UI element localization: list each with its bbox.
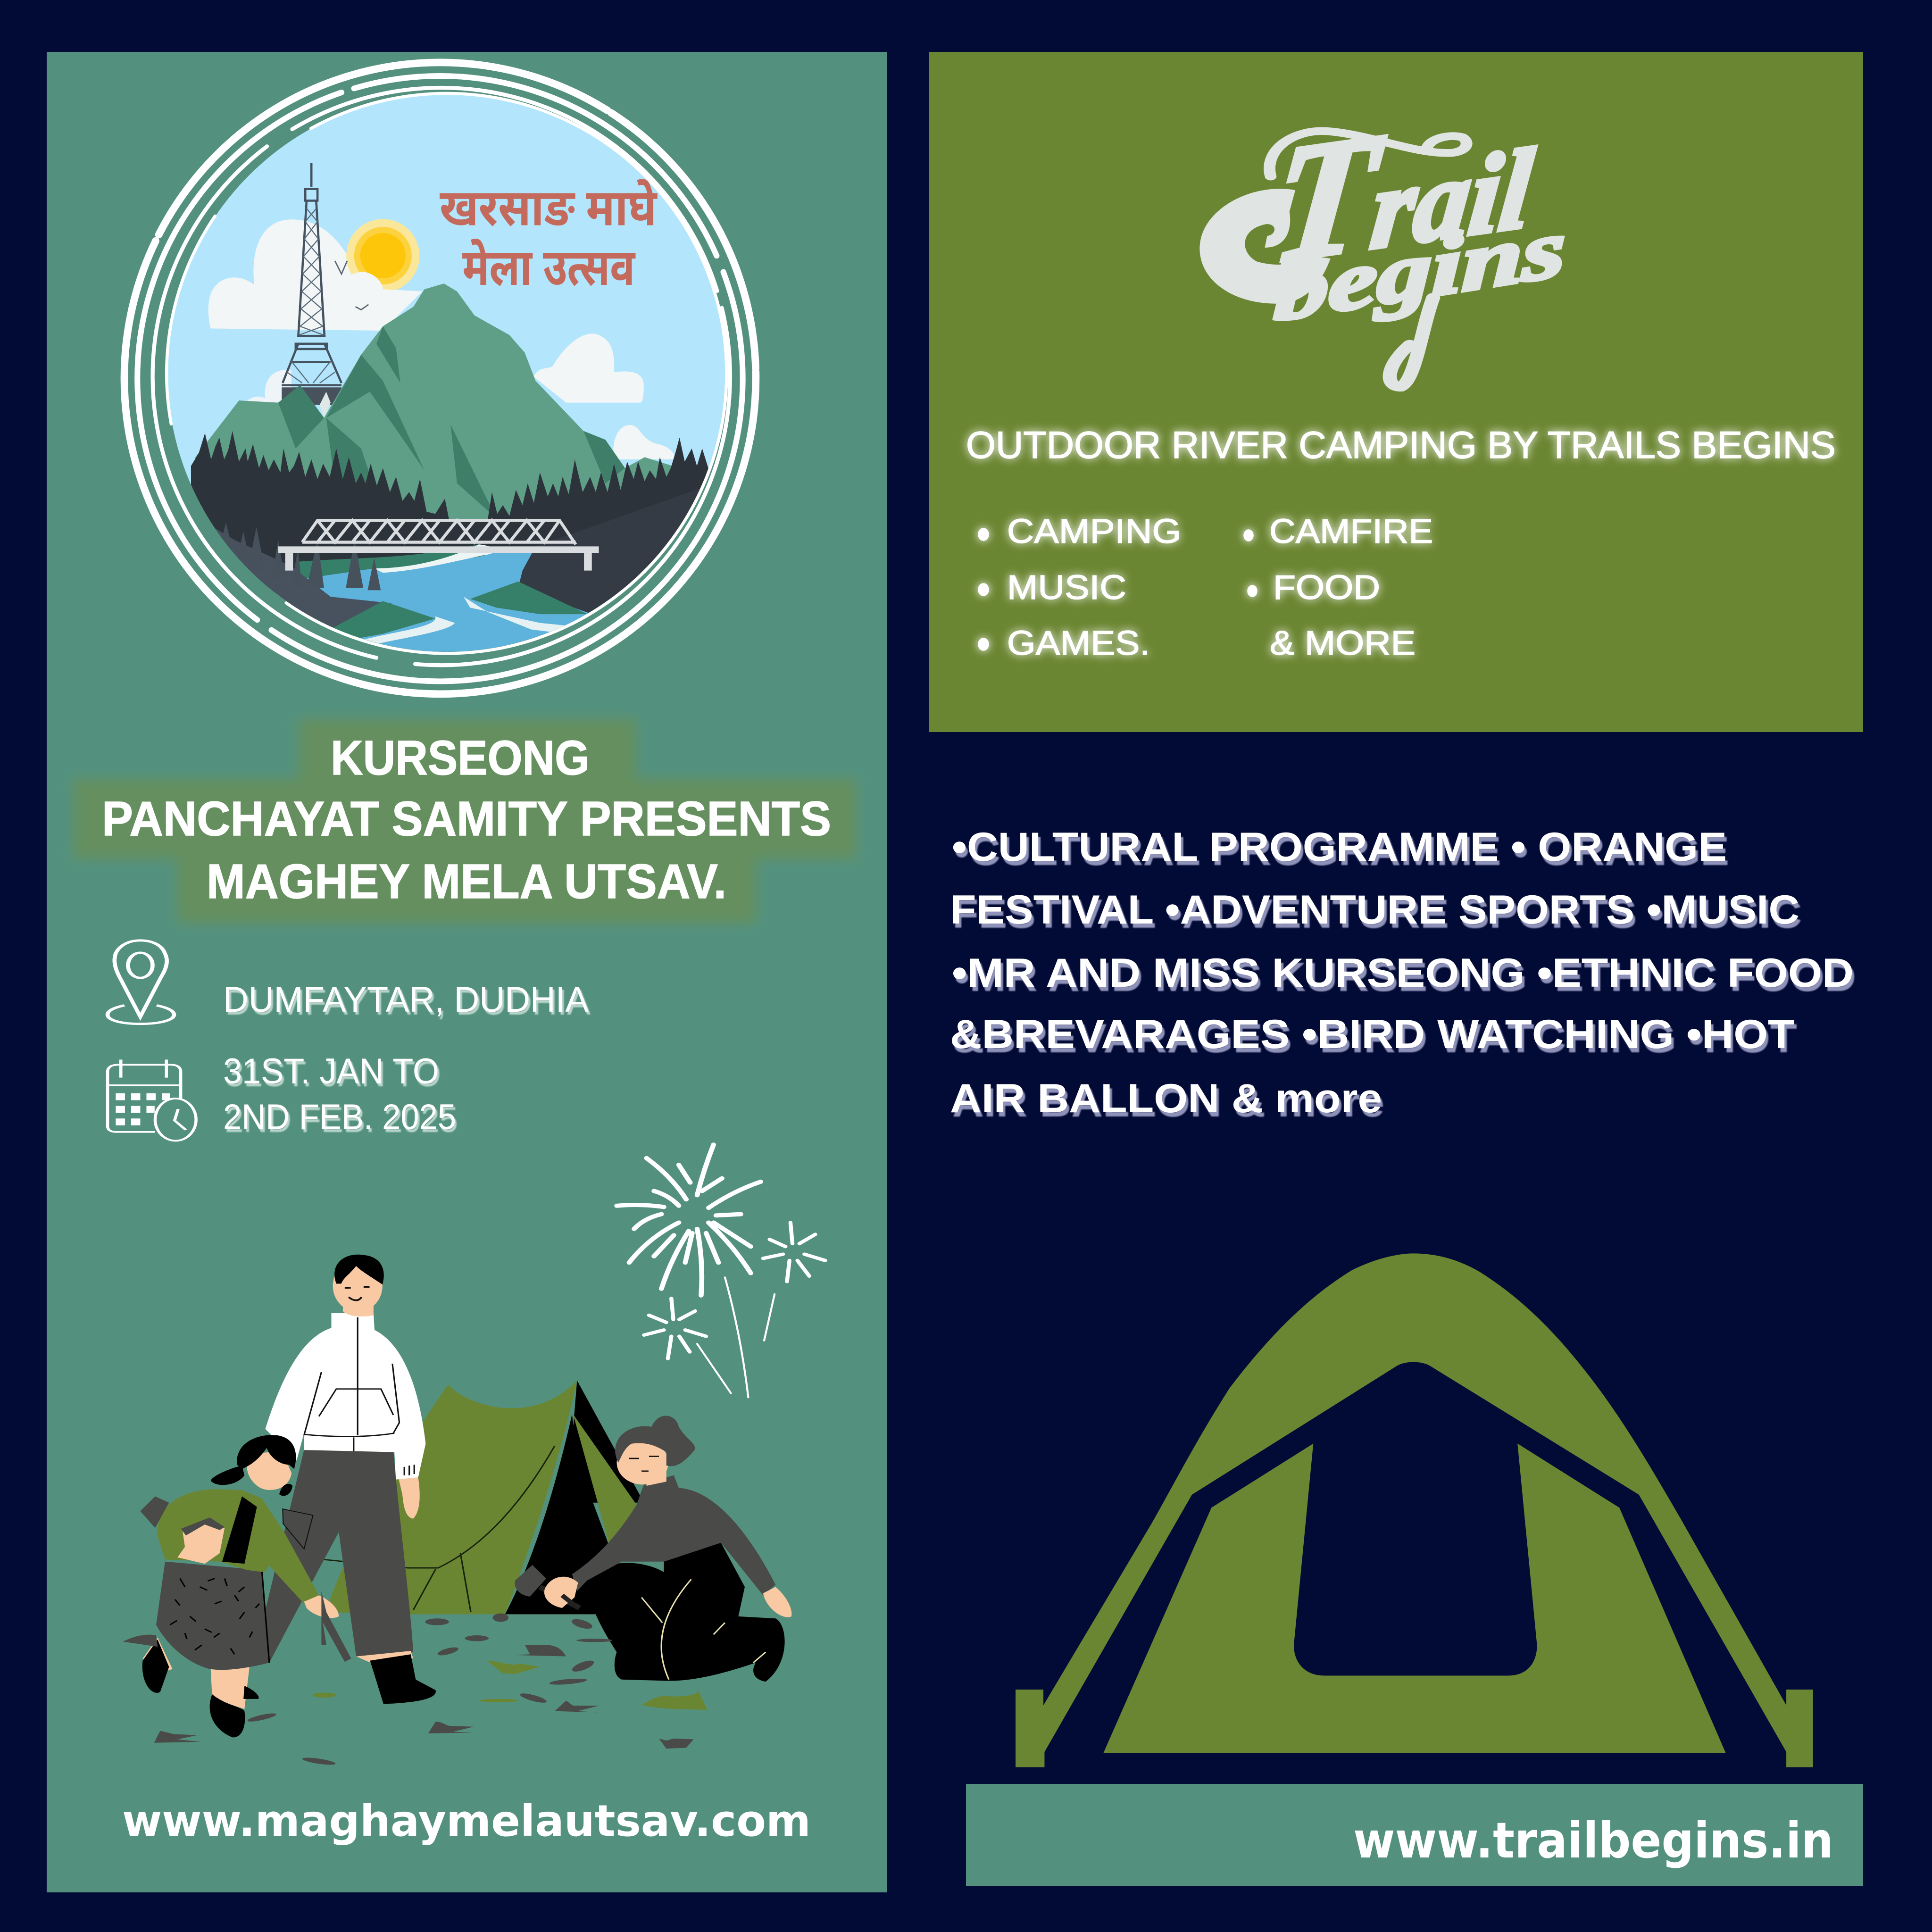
text: dates: 31ST. JAN TO [223,1051,439,1091]
list: activities right: FOOD [1273,569,1380,607]
illustration: festival logo badge [124,62,756,694]
text block: festival highlights: •MR AND MISS KURSEONG •ETHNIC FOOD [952,950,1854,996]
text block: festival highlights: •CULTURAL PROGRAMME • ORANGE [952,824,1727,870]
text block: festival highlights: AIR BALLON & more [950,1076,1382,1121]
ground leaves [123,1614,694,1766]
list: activities left: MUSIC [1007,569,1126,607]
illustration: campers and fireworks [123,1145,825,1766]
panel: festival [47,52,887,1892]
logo swashes [1199,131,1466,387]
text: location: DUMFAYTAR, DUDHIA [223,980,589,1020]
logo wordmark [1265,75,1566,339]
logo: trail begins [1199,75,1566,387]
list: activities right [1244,513,1433,662]
list: activities left: GAMES. [1007,625,1150,662]
text: dates: 2ND FEB. 2025 [223,1097,456,1137]
logo scene [191,163,715,656]
icon: location pin [108,941,174,1024]
list: activities left [978,513,1181,662]
heading highlight blocks [73,719,856,923]
panel: camping [929,52,1863,732]
banner: website [966,1784,1863,1886]
heading: event title [102,731,831,908]
logo title: मेला उत्सव [462,239,636,306]
text block: festival highlights: &BREVARAGES •BIRD WATCHING •HOT [950,1012,1795,1057]
logo bridge [278,520,599,571]
fireworks [617,1145,825,1398]
tent [324,1381,644,1614]
list: activities right: & MORE [1270,625,1416,662]
logo sky [167,93,726,652]
icon: dome tent [1016,1253,1813,1767]
heading: event title: PANCHAYAT SAMITY PRESENTS [102,791,831,846]
logo title: खरसाङ माघे [440,179,658,246]
logo wordmark: Trail [1265,75,1543,299]
list: activities right: CAMFIRE [1269,513,1433,550]
heading: event title: MAGHEY MELA UTSAV. [207,854,726,908]
man [262,1255,436,1704]
website url: festival: www.maghaymelautsav.com [122,1796,811,1846]
heading: river camping: OUTDOOR RIVER CAMPING BY TRAILS BEGINS [966,424,1836,466]
logo title [440,179,658,306]
text block: festival highlights [950,824,1854,1121]
logo wordmark: begins [1273,202,1566,339]
heading: event title: KURSEONG [331,731,590,785]
text: dates [223,1051,456,1137]
icon: calendar with clock [108,1059,196,1141]
logo brush rings [124,62,756,694]
list: activities left: CAMPING [1007,513,1181,550]
woman [515,1416,791,1682]
text block: festival highlights: FESTIVAL •ADVENTURE SPORTS •MUSIC [950,887,1799,933]
olive leaves [312,1661,707,1710]
girl [140,1435,351,1737]
website url: trail begins: www.trailbegins.in [1353,1812,1833,1869]
